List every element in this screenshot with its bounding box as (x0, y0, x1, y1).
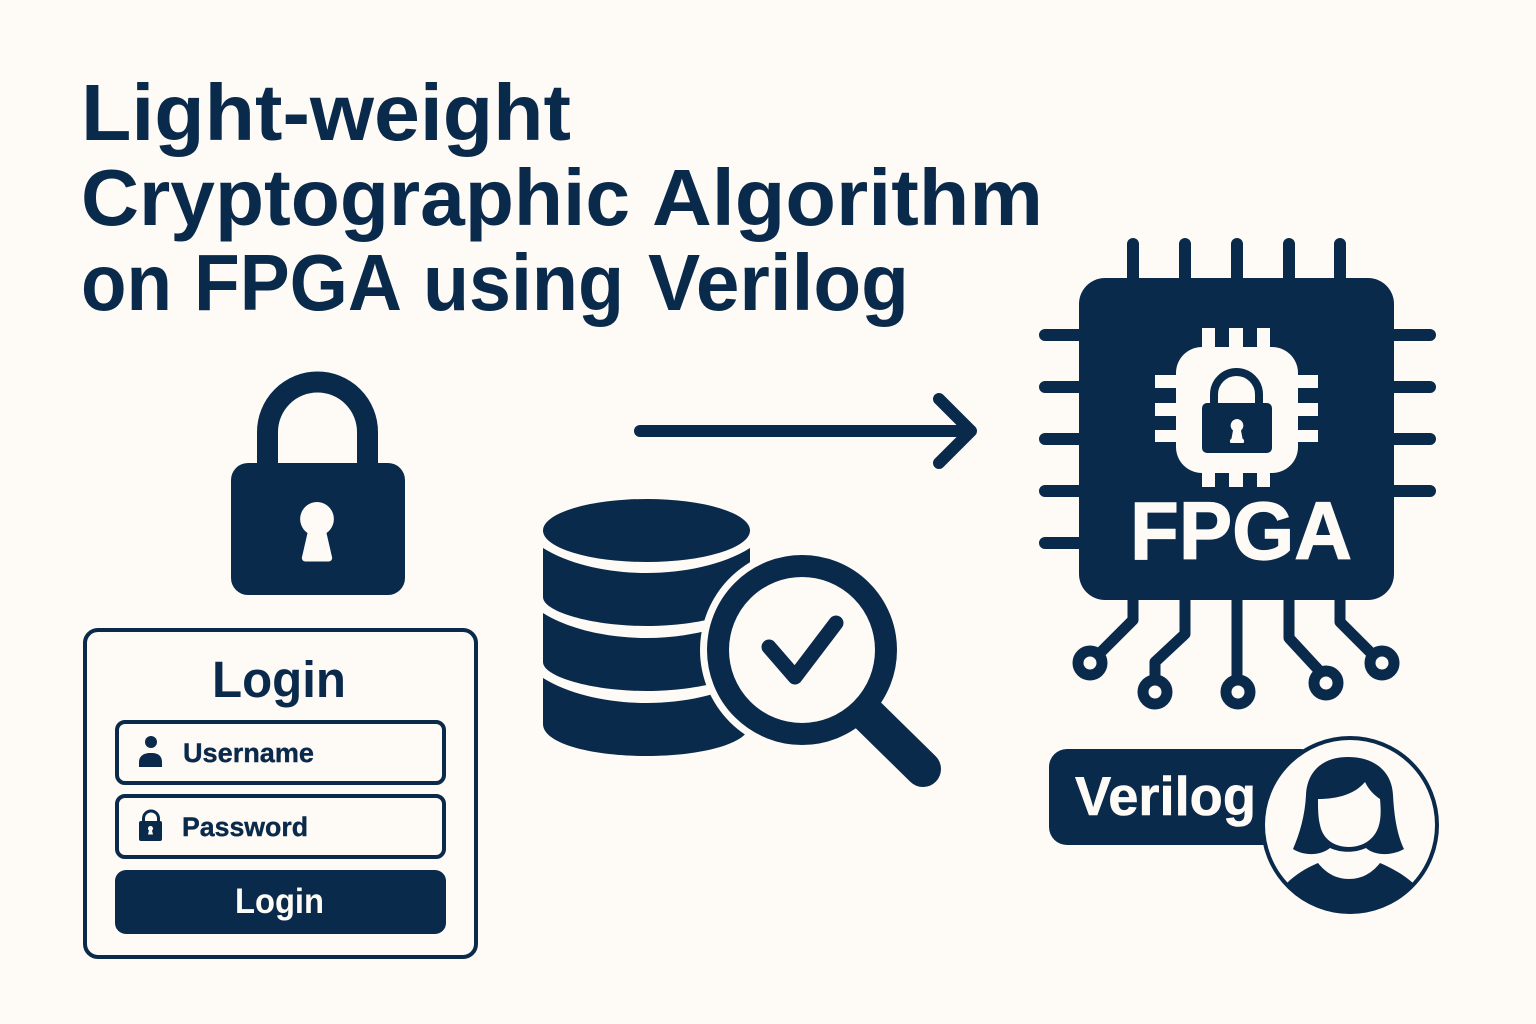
username field (117, 722, 444, 783)
face (1318, 782, 1381, 847)
shoulders (1288, 863, 1412, 910)
inner chip icon (1155, 328, 1318, 487)
title: Verilog (648, 238, 909, 327)
password field (117, 796, 444, 857)
title (81, 68, 1043, 327)
title: Algorithm (652, 153, 1043, 242)
icon: FPGA chip (1045, 244, 1430, 704)
panel: login form (85, 630, 476, 957)
Verilog badge (1049, 749, 1319, 845)
login button (115, 870, 446, 934)
login button: Login (235, 882, 324, 921)
title: Light-weight (81, 68, 571, 157)
title: on (81, 238, 172, 327)
database cylinder (543, 499, 750, 756)
title: FPGA (194, 238, 402, 327)
circuit traces (1078, 598, 1394, 704)
username field: Username (183, 738, 314, 768)
Verilog badge: Verilog (1075, 765, 1256, 827)
magnifying glass (718, 566, 923, 769)
password field: Password (182, 812, 308, 842)
title: using (423, 238, 624, 327)
hair (1293, 757, 1404, 854)
icon: database with magnifier check (543, 499, 923, 769)
FPGA label: FPGA (1130, 486, 1352, 577)
icon: person avatar (1263, 738, 1437, 925)
login heading: Login (212, 651, 346, 708)
arrow (640, 399, 971, 463)
title: Cryptographic (81, 153, 630, 242)
chip body (1079, 278, 1394, 600)
chip pins (1045, 244, 1430, 543)
icon: large padlock (231, 382, 405, 595)
inner padlock (1202, 372, 1272, 453)
